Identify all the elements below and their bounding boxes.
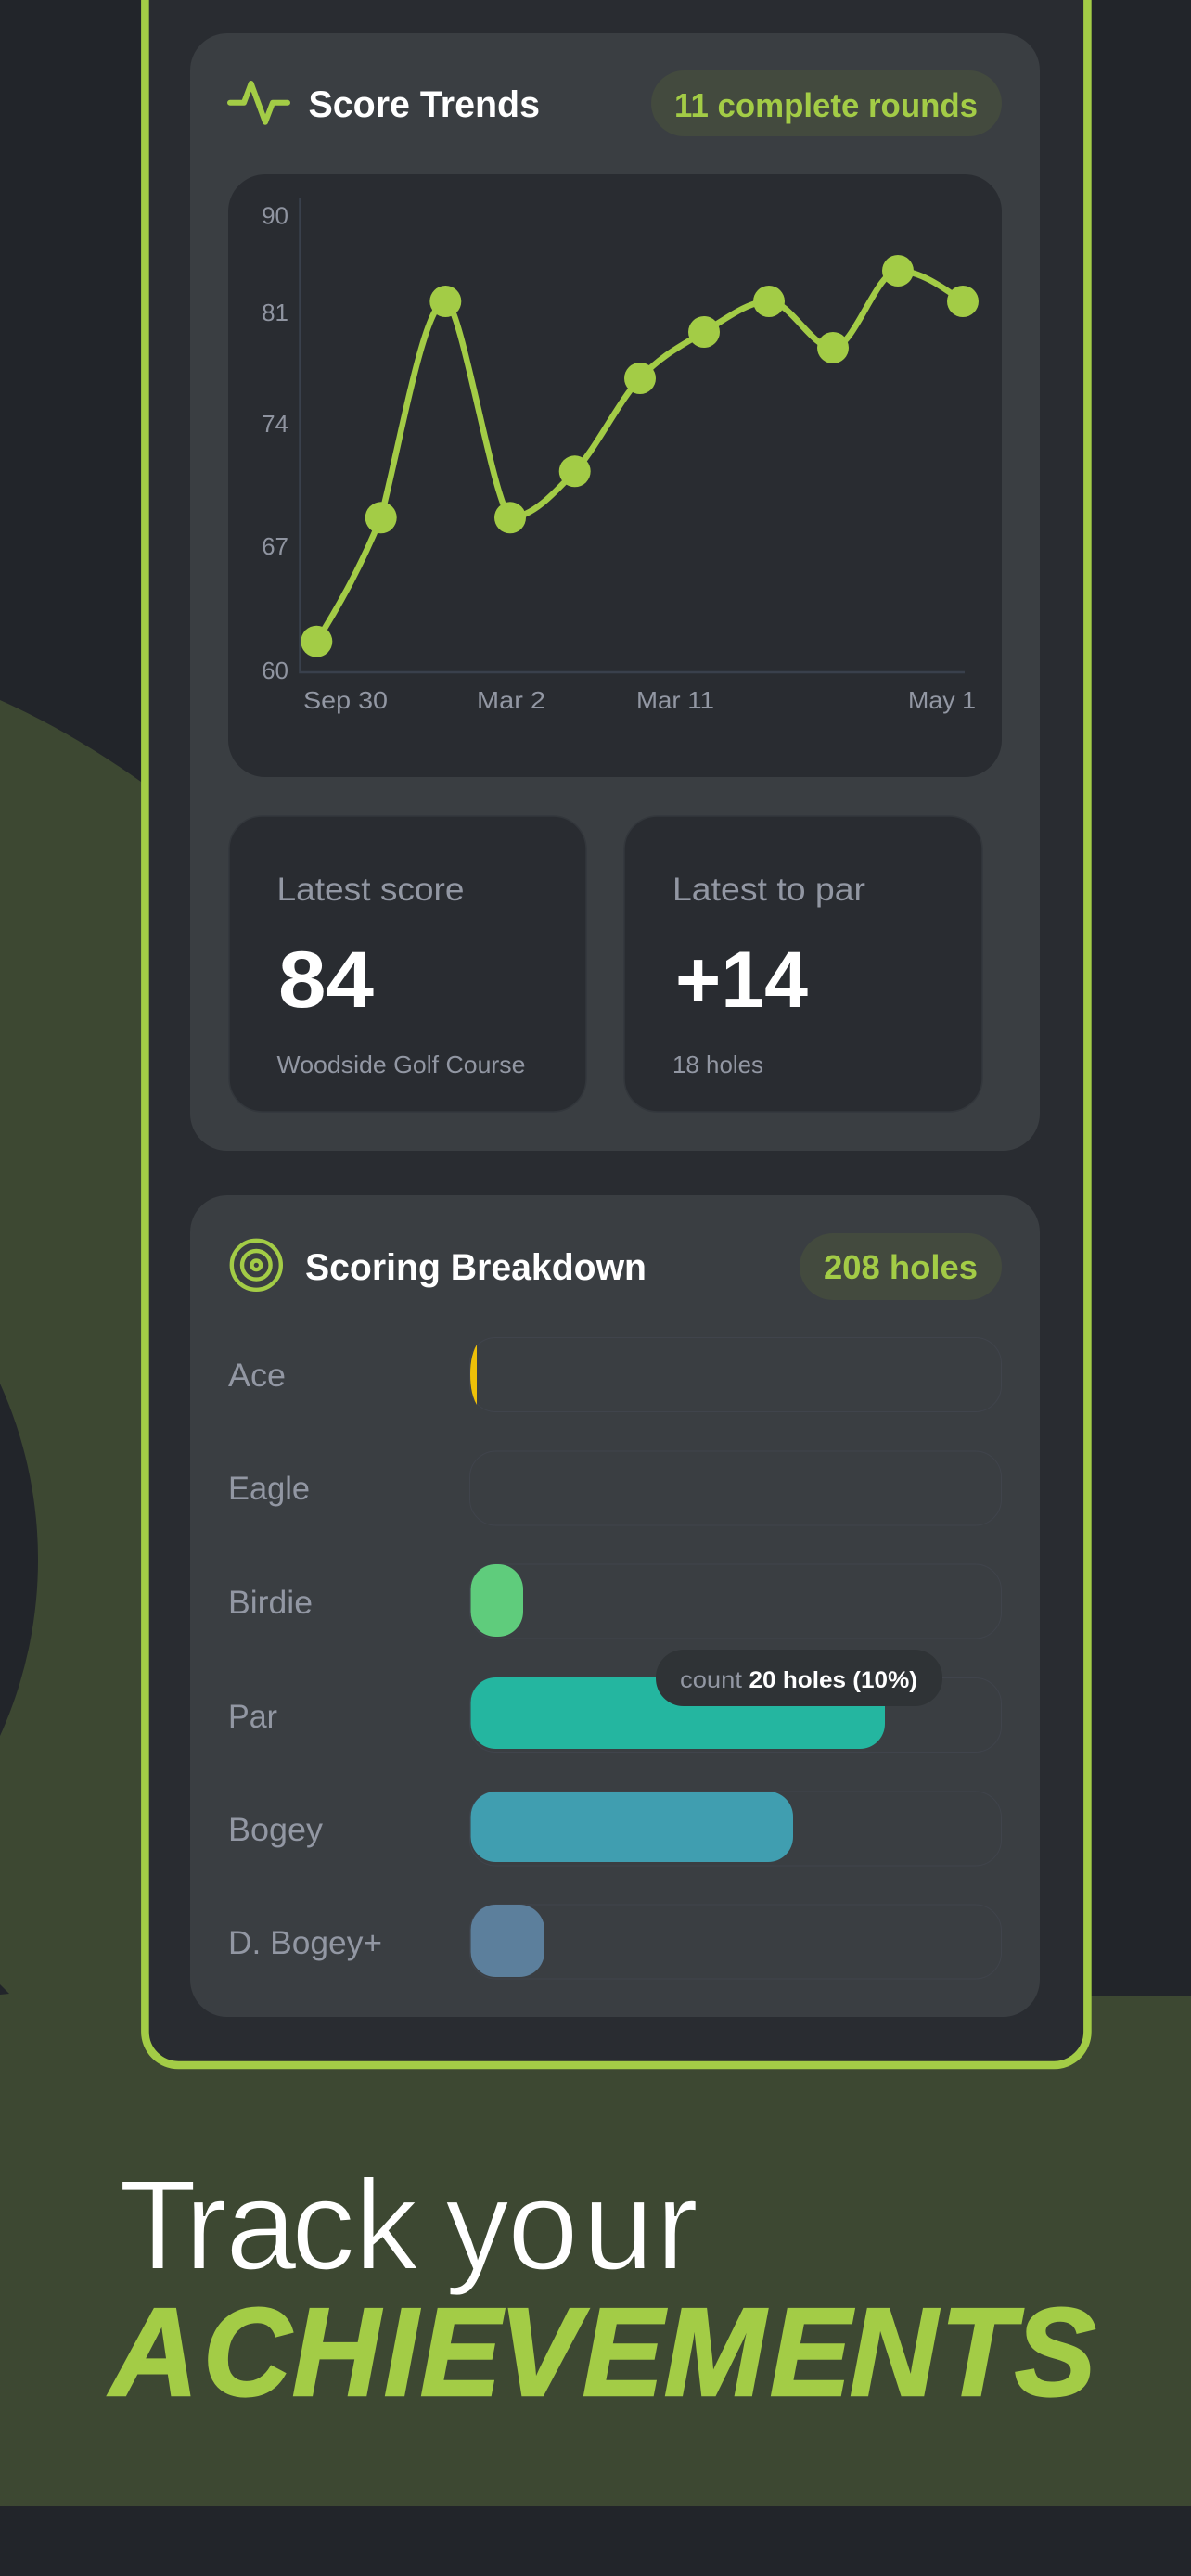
row: ace [228,1337,1002,1411]
heading: score trends: Score Trends [308,84,540,125]
stat card: latest score: Woodside Golf Course [276,1051,525,1078]
row: par: Par [228,1699,277,1735]
phone frame [145,0,1087,2065]
heading: scoring breakdown: Scoring Breakdown [305,1247,647,1288]
row: ace: Ace [228,1358,286,1394]
y axis labels: 67 [262,532,288,560]
row: birdie [228,1564,1002,1639]
tooltip: count [680,1667,742,1693]
line chart [228,174,1002,777]
score line [316,271,963,642]
tooltip: 20 holes (10%) [749,1667,917,1693]
headline: track your: Track your [119,2154,698,2297]
panel: score trends [190,33,1040,1151]
x axis labels: Mar 2 [477,686,545,714]
stat card: latest to par: Latest to par [672,872,865,908]
stat card: latest to par: +14 [675,936,808,1025]
stat card: latest score [229,816,586,1112]
row: birdie: Birdie [228,1585,313,1621]
x axis labels [303,686,976,714]
row: bogey: Bogey [228,1812,324,1848]
panel: scoring breakdown [190,1195,1040,2017]
headline: achievements: ACHIEVEMENTS [108,2283,1095,2422]
x axis labels: May 1 [908,686,976,714]
badge: holes [800,1233,1002,1300]
tooltip [656,1650,942,1706]
y axis labels: 74 [262,410,288,438]
icon: target [232,1241,281,1290]
row: double bogey: D. Bogey+ [228,1925,382,1961]
stat card: latest to par: 18 holes [672,1051,763,1078]
row: eagle [228,1451,1002,1525]
x axis labels: Sep 30 [303,686,388,714]
x axis labels: Mar 11 [636,686,714,714]
stat card: latest score: 84 [278,936,374,1025]
badge: complete rounds: 11 complete rounds [674,86,978,124]
y axis labels [262,202,288,684]
row: double bogey [228,1905,1002,1979]
stat card: latest score: Latest score [276,872,464,908]
chart axes [301,198,965,672]
stat card: latest to par [624,816,982,1112]
row: par [228,1677,1002,1753]
y axis labels: 90 [262,202,288,230]
y axis labels: 81 [262,299,288,326]
data points [301,255,979,657]
icon: pulse [230,83,288,122]
row: bogey [228,1792,1002,1866]
badge: holes: 208 holes [824,1248,978,1286]
y axis labels: 60 [262,657,288,684]
row: eagle: Eagle [228,1471,310,1507]
badge: complete rounds [651,70,1002,136]
